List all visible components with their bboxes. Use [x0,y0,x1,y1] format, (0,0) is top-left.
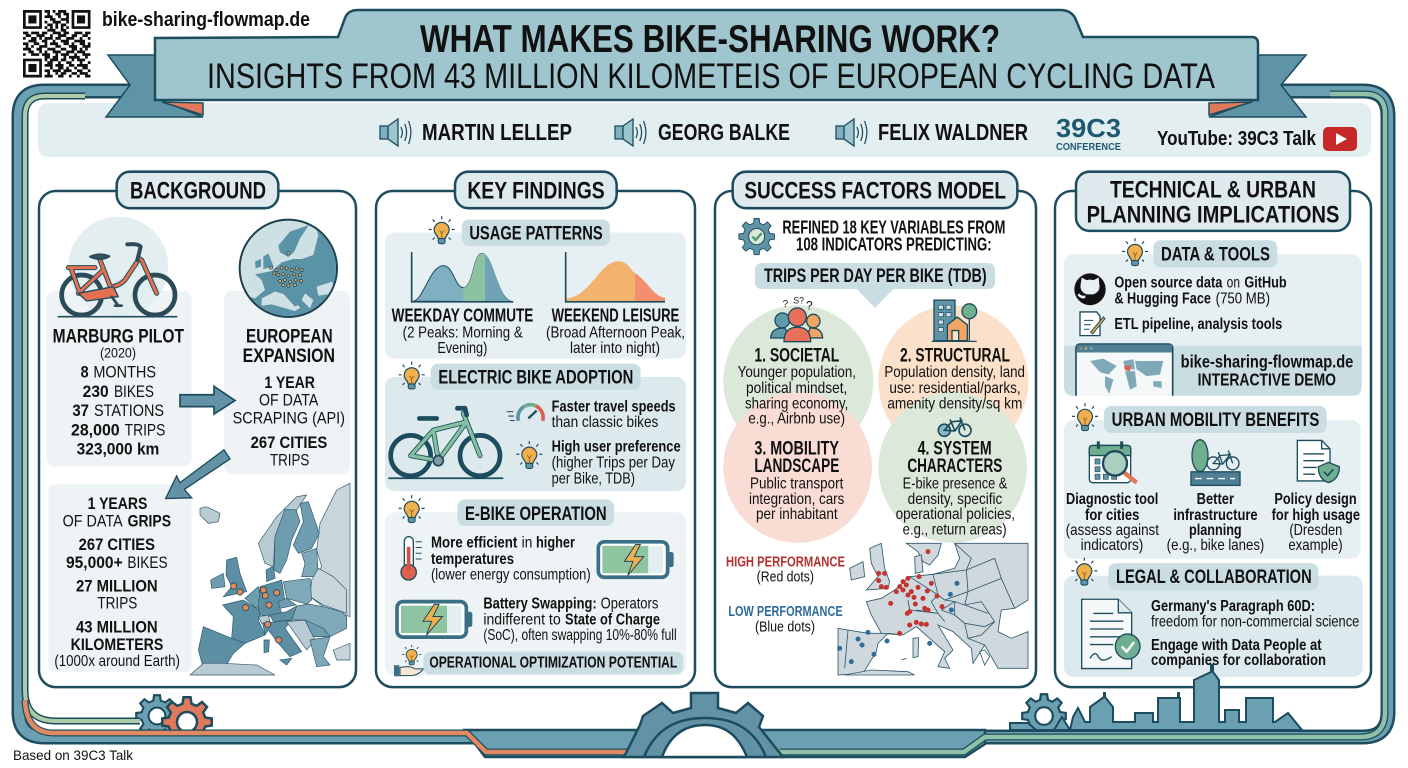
icon: hand with bulb [394,645,423,676]
text: user preference: per Bike, TDB) [552,470,635,487]
icon: people: ? [783,299,789,310]
text: temperature: More efficient [431,534,517,552]
icon: bulb [1072,403,1098,431]
stats: marburg: (2020) [100,346,136,361]
stats: marburg: 230 [83,382,109,401]
tag: usage patterns [462,220,610,246]
text: interactive demo: bike-sharing-flowmap.de [1181,352,1354,372]
text: paragraph 60d [1151,598,1359,630]
header band [38,103,1371,157]
text: diagnostic tool: for cities [1085,507,1139,524]
icon: people: ? [806,298,813,312]
factor 2: structural: amenity density/sq km [887,395,1022,412]
text: paragraph 60d: freedom for non-commercial science [1151,613,1359,630]
tag: optimization potential [423,652,683,674]
icon: bulb [1071,558,1097,585]
text: battery swapping: State of Charge [565,612,660,629]
icon: document and pen [1080,312,1105,336]
icon: bulb [516,441,542,468]
speaker name: MARTIN LELLEP [422,119,572,145]
chart: weekend leisure [566,252,665,302]
heading: key findings [455,172,617,208]
icon: skyline gear [1021,693,1067,729]
main title: WHAT MAKES BIKE-SHARING WORK? [420,18,1000,61]
block: results stats: OF DATA [63,511,123,531]
conference logo: 39C3 [1056,113,1121,143]
text: infrastructure planning: planning [1189,522,1242,539]
icon: battery [598,542,674,577]
text: policy design: (Dresden [1289,522,1342,539]
icon: signed document [1082,599,1140,669]
tag: electric bike adoption: ELECTRIC BIKE ADOPTION [438,368,633,389]
factor 2: structural: 2. STRUCTURAL [900,345,1010,367]
speaker name: GEORG BALKE [658,119,790,145]
map: performance dots [838,543,1028,675]
arrow: pilot to expansion [180,386,235,414]
panel: key findings [376,172,695,687]
icon: github [1074,273,1106,305]
heading: marburg pilot: MARBURG PILOT [53,325,184,347]
block: results stats: TRIPS [97,594,137,613]
panel: success factors model [715,172,1036,687]
tag: legal and collaboration: LEGAL & COLLABORATION [1116,567,1312,588]
icon: battery [397,602,472,637]
text: policy design: for high usage [1272,507,1360,524]
factor circle backgrounds [723,305,1028,543]
caption: weekend: later into night) [570,340,660,357]
icon: orange bike [58,217,177,317]
ribbon tails [106,55,1306,117]
block: european expansion [224,291,350,474]
callout: trips per day per bike: TRIPS PER DAY PER BIKE (TDB) [764,266,987,287]
tag: data and tools: DATA & TOOLS [1161,244,1270,266]
tag: urban mobility benefits [1104,406,1327,433]
icon: calendar magnifier [1089,441,1137,483]
text: faster speeds [552,399,676,431]
caption: weekend: (Broad Afternoon Peak, [546,324,685,341]
stats: expansion: 1 YEAR [264,373,315,392]
factor 4: system characters: e.g., return areas) [903,522,1007,539]
tag: urban mobility benefits: URBAN MOBILITY BENEFITS [1112,410,1320,431]
factor 1: societal: Younger population, [738,364,856,381]
icon: globe [238,220,342,318]
text: infrastructure planning [1167,491,1264,554]
source note: Based on 39C3 Talk [13,747,134,763]
panel: technical and urban planning [1055,172,1371,687]
stats: marburg: 37 [72,401,89,420]
heading: european expansion [243,325,335,367]
text: user preference: High user preference [552,438,681,456]
icon: left gears [135,694,213,730]
icon: tree and bike [1191,440,1240,485]
factor 3: mobility landscape: Public transport [750,475,844,492]
chart: weekday commute [412,252,513,302]
text: user preference [552,438,681,487]
heading: background: BACKGROUND [130,178,266,205]
heading: technical and urban planning: PLANNING IMPLICATIONS [1087,201,1339,228]
tag: usage patterns: USAGE PATTERNS [469,223,603,244]
block: results stats [48,484,192,672]
tag: legal and collaboration [1108,563,1318,590]
text: open source: & Hugging Face [1114,290,1211,308]
block: results stats: 267 CITIES [79,535,155,554]
text: battery swapping: Operators [601,595,659,612]
skyline [1010,665,1302,730]
legend: low performance [728,604,843,635]
stats: expansion [233,373,345,470]
icon: speaker [380,119,411,146]
caption: weekday: WEEKDAY COMMUTE [392,305,533,325]
conference logo: CONFERENCE [1056,142,1121,153]
stats: expansion: OF DATA [259,390,319,410]
text: interactive demo: INTERACTIVE DEMO [1198,370,1336,390]
stats: expansion: TRIPS [270,451,309,470]
icon: small bike [938,417,971,436]
text: diagnostic tool: (assess against [1066,522,1160,539]
arrow: expansion to results [166,450,230,499]
block: results stats: 95,000+ [66,553,123,572]
legend: high performance: (Red dots) [757,570,814,586]
icon: bulb [1122,238,1148,266]
icon: speaker [615,119,646,146]
section: electric bike adoption [385,362,686,491]
heading: european expansion: EUROPEAN [246,325,333,347]
text: open source: on [1227,275,1240,292]
text: temperature: temperatures [431,551,514,568]
text: battery swapping: Battery Swapping: [483,595,597,612]
text: diagnostic tool: indicators) [1081,537,1143,554]
text: policy design: Policy design [1274,491,1357,508]
stats: expansion: SCRAPING (API) [233,408,345,428]
factor 1: societal [738,345,856,428]
text: policy design: example) [1288,537,1343,554]
icon: people [771,295,823,342]
text: engage data people [1151,637,1326,669]
block: results stats: 1 YEARS [88,494,147,513]
text: etl pipeline: ETL pipeline, analysis tools [1114,316,1282,333]
stats: marburg: 8 [81,362,89,382]
text: open source: Open source data [1114,275,1223,292]
tag: e-bike operation: E-BIKE OPERATION [465,504,607,525]
block: results stats: 27 MILLION [76,576,158,596]
heading: success factors model [733,172,1017,208]
section: e-bike operation [385,495,686,676]
icon: gear with check [739,219,774,255]
stats: marburg: 28,000 [71,420,120,439]
factor 3: mobility landscape: per inhabitant [756,506,838,523]
caption: weekend [546,305,685,357]
text: infrastructure planning: infrastructure [1173,507,1258,524]
qr code [23,10,90,78]
block: results stats: (1000x around Earth) [54,653,180,670]
factor 4: system characters: density, specific [908,491,1002,508]
text: temperature: higher [536,534,575,552]
section: data and tools [1064,238,1362,396]
heading: success factors model: SUCCESS FACTORS MODEL [744,178,1006,205]
legend: low performance: (Blue dots) [755,619,815,635]
stats: marburg: 323,000 km [77,439,159,459]
title ribbon [155,10,1258,100]
factor 1: societal: sharing economy, [745,395,848,412]
stats: marburg: BIKES [114,382,154,401]
tag: optimization potential: OPERATIONAL OPTIMIZATION POTENTIAL [429,654,677,672]
factor 4: system characters [896,437,1015,539]
icon: speaker [836,119,867,146]
icon: buildings [932,300,977,341]
heading: technical and urban planning: TECHNICAL & URBAN [1110,177,1316,204]
map: europe cities [190,483,350,675]
heading: background [117,172,278,208]
icon: bulb [399,362,425,389]
tag: electric bike adoption [431,364,641,390]
factor 3: mobility landscape: 3. MOBILITY [754,437,839,460]
icon: browser world map [1076,344,1173,396]
block: results stats: BIKES [127,553,168,572]
text: battery swapping: indifferent to [483,612,561,629]
panel: background [39,172,356,687]
text: diagnostic tool: Diagnostic tool [1066,491,1158,508]
text: user preference: (higher Trips per Day [552,454,675,471]
heading: technical and urban planning [1076,172,1350,231]
text: engage data people: Engage with Data People at [1151,637,1322,654]
icon: bulb [429,216,455,244]
legend: low performance: LOW PERFORMANCE [728,604,843,620]
stats: marburg: MONTHS [93,362,156,382]
central gear arch [624,693,783,757]
website url: bike-sharing-flowmap.de [102,9,310,31]
icon: green e-bike [389,408,503,478]
block: results stats: KILOMETERS [71,635,163,654]
text: faster speeds: Faster travel speeds [552,399,676,416]
factor 3: mobility landscape [749,437,844,523]
factor 1: societal: political mindset, [746,380,847,397]
icon: thermometer [401,537,422,580]
factor 1: societal: e.g., Airbnb use) [748,410,845,428]
text: paragraph 60d: Germany's Paragraph 60D: [1151,598,1315,615]
block: results stats: 43 MILLION [76,617,158,636]
block: marburg pilot [47,291,192,467]
text: temperature: in [522,534,532,552]
stats: expansion: 267 CITIES [251,433,327,452]
factor 4: system characters: operational policies, [896,506,1015,523]
icon: speedometer [507,405,543,421]
text: faster speeds: than classic bikes [552,414,659,431]
intro text: REFINED 18 KEY VARIABLES FROM [782,217,1005,238]
subtitle: INSIGHTS FROM 43 MILLION KILOMETEIS OF EUROPEAN CYCLING DATA [207,57,1216,96]
stats: marburg [71,346,165,459]
speakers row [380,119,1028,146]
factor 4: system characters: CHARACTERS [907,455,1002,477]
text: open source: (750 MB) [1216,290,1270,308]
text: battery swapping: (SoC), often swapping 10%-80% full [483,627,677,644]
text: diagnostic tool [1066,491,1160,554]
intro text [782,217,1005,254]
factor 2: structural: Population density, land [884,364,1025,381]
factor 3: mobility landscape: integration, cars [749,491,844,508]
caption: weekday [392,305,533,357]
text: interactive demo [1181,352,1354,390]
tag: data and tools [1153,240,1277,267]
icon: document with shield [1297,440,1339,483]
text: temperature [431,534,591,584]
legend: high performance: HIGH PERFORMANCE [726,554,845,571]
text: open source: GitHub [1244,275,1287,292]
callout: trips per day per bike [755,263,995,308]
text: infrastructure planning: Better [1197,491,1234,508]
factor 1: societal: 1. SOCIETAL [754,345,839,367]
heading: european expansion: EXPANSION [243,345,335,367]
legend: high performance [726,554,845,586]
section: usage patterns [385,216,686,359]
stats: marburg: STATIONS [94,401,164,420]
text: temperature: (lower energy consumption) [431,567,591,584]
speaker name: FELIX WALDNER [878,119,1028,145]
text: infrastructure planning: (e.g., bike lanes) [1167,537,1264,554]
heading: key findings: KEY FINDINGS [467,178,605,205]
icon: bulb [399,495,425,523]
factor 4: system characters: 4. SYSTEM [918,437,992,460]
icon: people: S? [793,295,804,306]
text: policy design [1272,491,1360,554]
text: battery swapping [483,595,677,644]
block: results stats: GRIPS [128,511,171,531]
youtube link: YouTube: 39C3 Talk [1157,128,1317,150]
section: legal and collaboration [1064,558,1363,677]
caption: weekday: Evening) [437,340,487,357]
text: engage data people: companies for collaboration [1151,652,1326,669]
factor 3: mobility landscape: LANDSCAPE [754,455,839,477]
section: urban mobility benefits [1064,403,1361,559]
stats: marburg: TRIPS [125,420,165,439]
factor 2: structural: use: residential/parks, [889,380,1021,397]
text: open source [1114,275,1287,308]
intro text: 108 INDICATORS PREDICTING: [796,234,992,254]
factor 4: system characters: E-bike presence & [903,475,1008,492]
caption: weekday: (2 Peaks: Morning & [403,324,523,341]
factor 2: structural [884,345,1025,412]
caption: weekend: WEEKEND LEISURE [552,305,679,325]
tag: e-bike operation [457,500,614,526]
